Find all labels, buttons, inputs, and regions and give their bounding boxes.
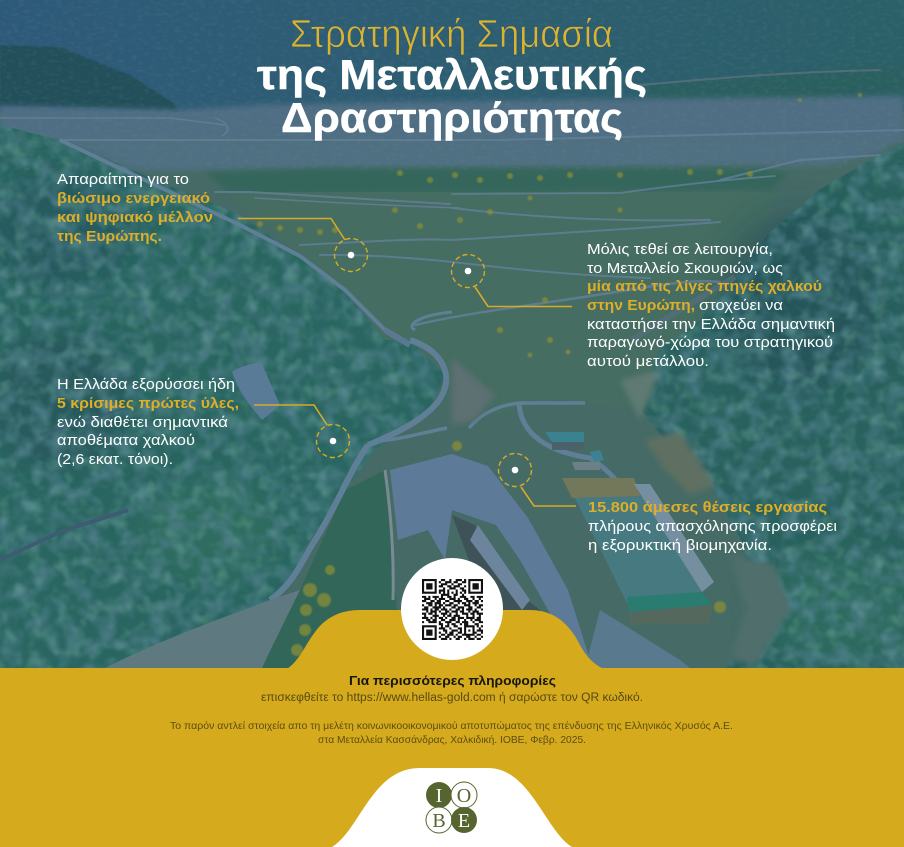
callout 2 text: μία από τις λίγες πηγές χαλκού	[587, 278, 822, 295]
service road	[585, 610, 690, 668]
title line 1: gold: Στρατηγική Σημασία	[290, 13, 613, 56]
callout 1 leader and marker	[238, 218, 368, 272]
footer text	[170, 674, 733, 746]
callout 4: jobs	[498, 454, 837, 554]
slope base	[227, 192, 530, 196]
logo circle I: Ι	[436, 785, 442, 807]
logo circle B: Β	[432, 810, 446, 832]
callout 3 text	[57, 376, 239, 468]
footer gold band with tab	[0, 610, 904, 847]
left forest	[0, 125, 445, 668]
callout 2 text: στην Ευρώπη,	[587, 297, 695, 314]
concrete embankment	[390, 454, 590, 660]
callout 1 text: της Ευρώπης.	[57, 228, 162, 245]
callout 1 text: βιώσιμο ενεργειακό	[57, 190, 210, 207]
logo circle O: Ο	[457, 785, 471, 807]
callout 2 text	[587, 241, 835, 370]
callout 3 text: 5 κρίσιμες πρώτες ύλες,	[57, 395, 239, 412]
QR code	[422, 579, 483, 640]
callout 2 text: στοχεύει να	[699, 297, 783, 314]
tan rock patches	[452, 358, 790, 665]
callout 3 text: (2,6 εκατ. τόνοι).	[57, 451, 173, 468]
title line 3: white bold: Δραστηριότητας	[281, 94, 623, 141]
footer white tab	[332, 768, 572, 847]
terrace roads	[0, 70, 904, 325]
callout 1 text: και ψηφιακό μέλλον	[57, 209, 213, 226]
callout 2 text: το Μεταλλείο Σκουριών, ως	[587, 260, 783, 277]
slope and hill texture	[0, 0, 904, 170]
treatment pond	[575, 492, 702, 603]
source line 2: στα Μεταλλεία Κασσάνδρας, Χαλκιδική. ΙΟΒΕ, Φεβρ. 2025.	[318, 734, 586, 746]
callout 4 text: 15.800 άμεσες θέσεις εργασίας	[588, 499, 827, 516]
callout 2 text: παραγωγό-χώρα του στρατηγικού	[587, 334, 833, 351]
forest texture	[0, 125, 904, 668]
callout 2 text: Μόλις τεθεί σε λειτουργία,	[587, 241, 773, 258]
footer link line: επισκεφθείτε το https://www.hellas-gold.com ή σαρώστε τον QR κωδικό.	[261, 692, 643, 704]
IOBE logo	[426, 782, 477, 833]
logo circle E: Ε	[458, 810, 470, 832]
title line 2: white bold: της Μεταλλευτικής	[257, 51, 647, 98]
right forest	[639, 143, 904, 668]
yellow shrubs	[257, 93, 862, 656]
callout 3 leader and marker	[254, 405, 350, 458]
callout 3 text: Η Ελλάδα εξορύσσει ήδη	[57, 376, 235, 393]
callout 3: critical raw materials	[57, 376, 350, 468]
grey turnaround patch	[232, 363, 280, 420]
source line 1: Το παρόν αντλεί στοιχεία απο τη μελέτη κοινωνικοοικονομικού αποτυπώματος της επένδυσης της Ελληνικός Χρυσός Α.Ε.	[170, 720, 733, 732]
upper hills	[0, 0, 904, 196]
lower centre green verge	[262, 470, 402, 668]
callout 2 leader and marker	[452, 254, 572, 306]
small buildings	[545, 432, 584, 442]
footer heading: Για περισσότερες πληροφορίες	[349, 674, 556, 688]
title	[257, 13, 647, 141]
callout 2: Skouries copper	[452, 241, 835, 370]
callout 1 text: Απαραίτητη για το	[57, 171, 189, 188]
callout 1: European future	[57, 171, 368, 272]
callout 4 text: η εξορυκτική βιομηχανία.	[588, 537, 772, 554]
background: aerial photo of the mine valley	[0, 0, 904, 670]
callout 4 leader and marker	[498, 454, 576, 506]
callout 4 text	[588, 499, 837, 554]
QR code badge	[401, 558, 503, 660]
callout 1 text	[57, 171, 213, 245]
callout 3 text: αποθέματα χαλκού	[57, 432, 195, 449]
forest tonal patches	[0, 170, 904, 670]
callout 2 text: αυτού μετάλλου.	[587, 353, 709, 370]
dirt road fan	[105, 590, 300, 668]
callout 2 text: καταστήσει την Ελλάδα σημαντική	[587, 316, 835, 333]
callout 3 text: ενώ διαθέτει σημαντικά	[57, 414, 228, 431]
main roads	[0, 140, 735, 600]
callout 4 text: πλήρους απασχόλησης προσφέρει	[588, 518, 837, 535]
